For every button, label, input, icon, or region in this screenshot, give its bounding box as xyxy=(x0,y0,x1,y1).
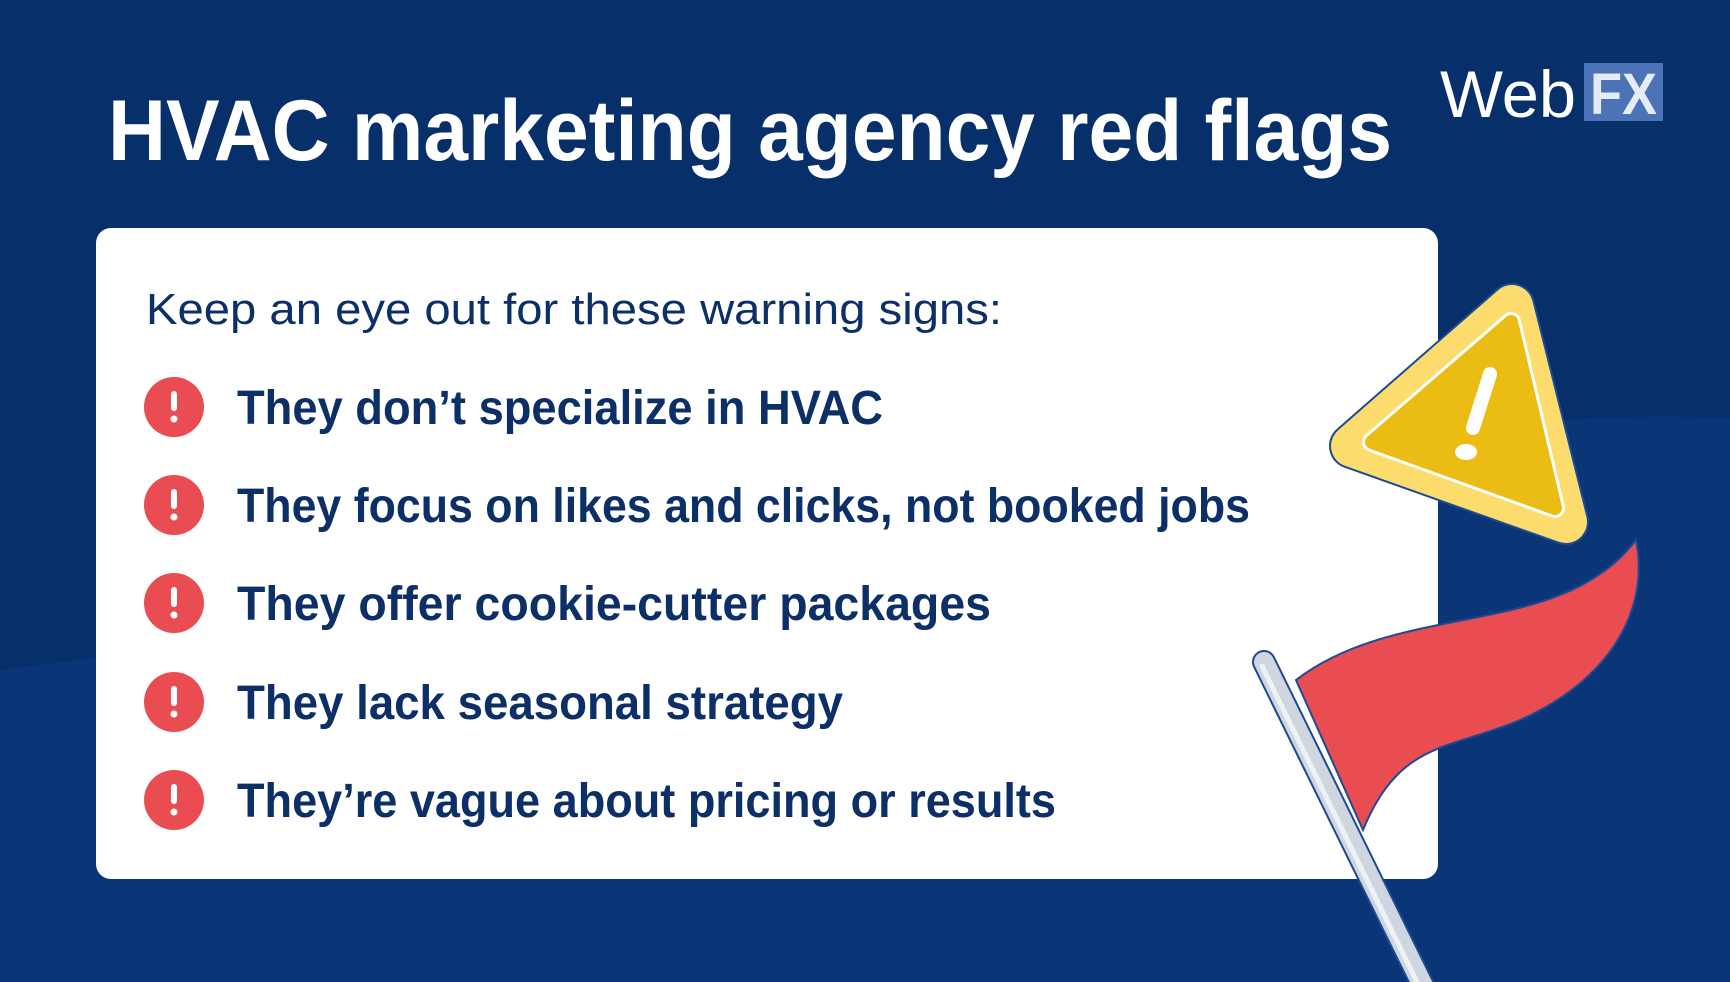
logo: WebFX: FX xyxy=(1590,62,1657,127)
logo: WebFX: Web xyxy=(1440,57,1576,131)
icon: red flag xyxy=(1262,540,1639,982)
panel: warning signs card xyxy=(96,228,1438,879)
logo: WebFX xyxy=(1440,57,1663,131)
item 4: They lack seasonal strategy xyxy=(237,677,843,730)
item 3: They offer cookie-cutter packages xyxy=(237,578,991,631)
icon: warning triangle xyxy=(1352,306,1566,522)
item 2: They focus on likes and clicks, not booked jobs xyxy=(237,480,1250,533)
subheading: Keep an eye out for these warning signs: xyxy=(146,285,1002,334)
item 5: They’re vague about pricing or results xyxy=(237,775,1056,828)
item 1: They don’t specialize in HVAC xyxy=(237,382,883,435)
title: HVAC marketing agency red flags xyxy=(108,83,1392,179)
